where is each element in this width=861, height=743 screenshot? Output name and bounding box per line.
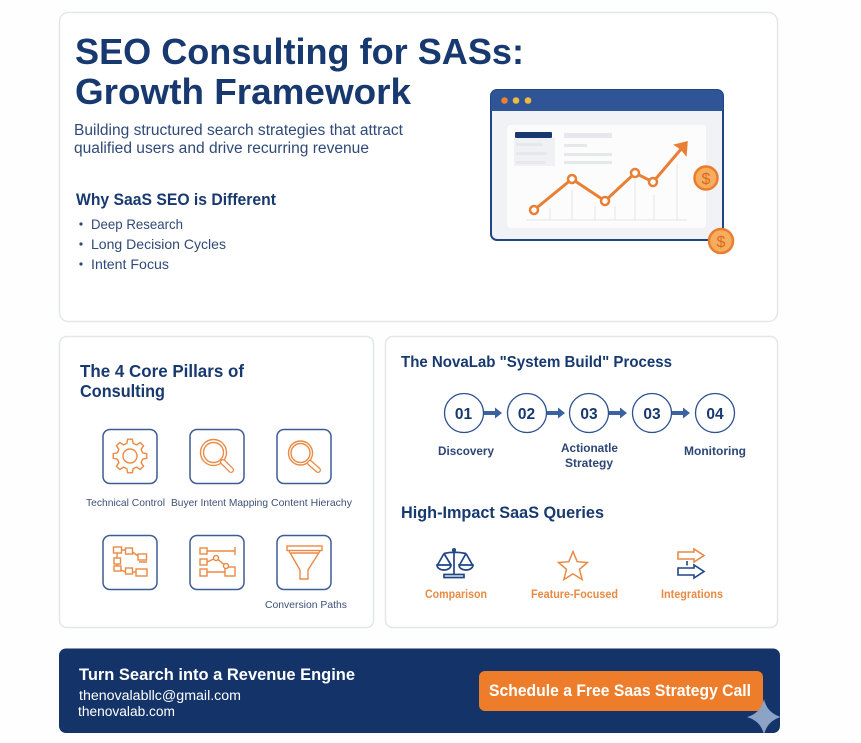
heading: system build process: The NovaLab "System Build" Process bbox=[401, 354, 672, 371]
label: integrations: Integrations bbox=[661, 587, 723, 601]
panel: core pillars bbox=[60, 336, 374, 628]
step numbers: 03 bbox=[643, 406, 661, 423]
step numbers: 03 bbox=[580, 406, 598, 423]
subtitle bbox=[74, 122, 404, 157]
title: SEO Consulting for SASs: bbox=[75, 31, 524, 72]
bullet list: Long Decision Cycles bbox=[91, 236, 226, 252]
heading: core pillars: The 4 Core Pillars of bbox=[80, 361, 244, 381]
banner: call to action bbox=[59, 648, 781, 735]
heading: high-impact queries: High-Impact SaaS Queries bbox=[401, 504, 604, 522]
label: feature-focused: Feature-Focused bbox=[531, 587, 618, 601]
step labels: Monitoring bbox=[684, 444, 746, 458]
label: technical control: Technical Control bbox=[86, 497, 165, 509]
step labels bbox=[438, 441, 746, 470]
step labels: Actionatle bbox=[561, 441, 618, 455]
icon: magnifier bbox=[277, 430, 331, 484]
bullet list: Deep Research bbox=[91, 216, 183, 232]
heading: core pillars bbox=[80, 361, 244, 401]
label: content hierarchy: Content Hierachy bbox=[271, 497, 353, 509]
heading: core pillars: Consulting bbox=[80, 381, 165, 401]
title: Growth Framework bbox=[75, 71, 412, 112]
panel: process and queries bbox=[386, 336, 778, 628]
icon: funnel bbox=[277, 536, 331, 590]
step labels: Discovery bbox=[438, 444, 494, 458]
contact details: thenovalab.com bbox=[78, 704, 175, 719]
step numbers: 04 bbox=[706, 406, 724, 423]
bullet list: Intent Focus bbox=[91, 256, 169, 272]
banner heading: Turn Search into a Revenue Engine bbox=[79, 666, 355, 684]
icon: sparkle bbox=[747, 699, 781, 735]
icon: coin: $ bbox=[717, 234, 726, 251]
bullet list bbox=[79, 216, 226, 272]
arrows bbox=[484, 408, 690, 418]
step numbers: 01 bbox=[455, 406, 472, 423]
illustration: browser growth chart bbox=[491, 90, 733, 253]
icon: flow diagram bbox=[103, 536, 157, 590]
button: schedule call bbox=[479, 671, 763, 711]
icon: star bbox=[558, 552, 588, 580]
step numbers bbox=[455, 406, 724, 423]
step labels: Strategy bbox=[565, 456, 613, 470]
panel: hero bbox=[60, 12, 778, 322]
icon: integration arrows bbox=[678, 549, 704, 578]
button: schedule call: Schedule a Free Saas Strategy Call bbox=[489, 682, 751, 700]
step numbers: 02 bbox=[518, 406, 535, 423]
icon: gear bbox=[103, 430, 157, 484]
icon: magnifier bbox=[190, 430, 244, 484]
label: comparison: Comparison bbox=[425, 587, 487, 601]
icon: coin: $ bbox=[702, 171, 711, 188]
subtitle: qualified users and drive recurring revenue bbox=[74, 140, 369, 157]
icon: process map bbox=[190, 536, 244, 590]
process flow bbox=[438, 394, 746, 470]
label: conversion paths: Conversion Paths bbox=[265, 599, 347, 611]
heading: why SaaS SEO is different: Why SaaS SEO is Different bbox=[76, 190, 276, 209]
contact details bbox=[78, 688, 241, 719]
icon: coin bbox=[709, 229, 733, 253]
icon: coin bbox=[694, 166, 718, 190]
label: buyer intent mapping: Buyer Intent Mapping bbox=[171, 497, 268, 509]
title bbox=[75, 31, 524, 112]
icon: scales bbox=[437, 549, 473, 578]
subtitle: Building structured search strategies that attract bbox=[74, 122, 404, 139]
contact details: thenovalabllc@gmail.com bbox=[79, 688, 241, 703]
